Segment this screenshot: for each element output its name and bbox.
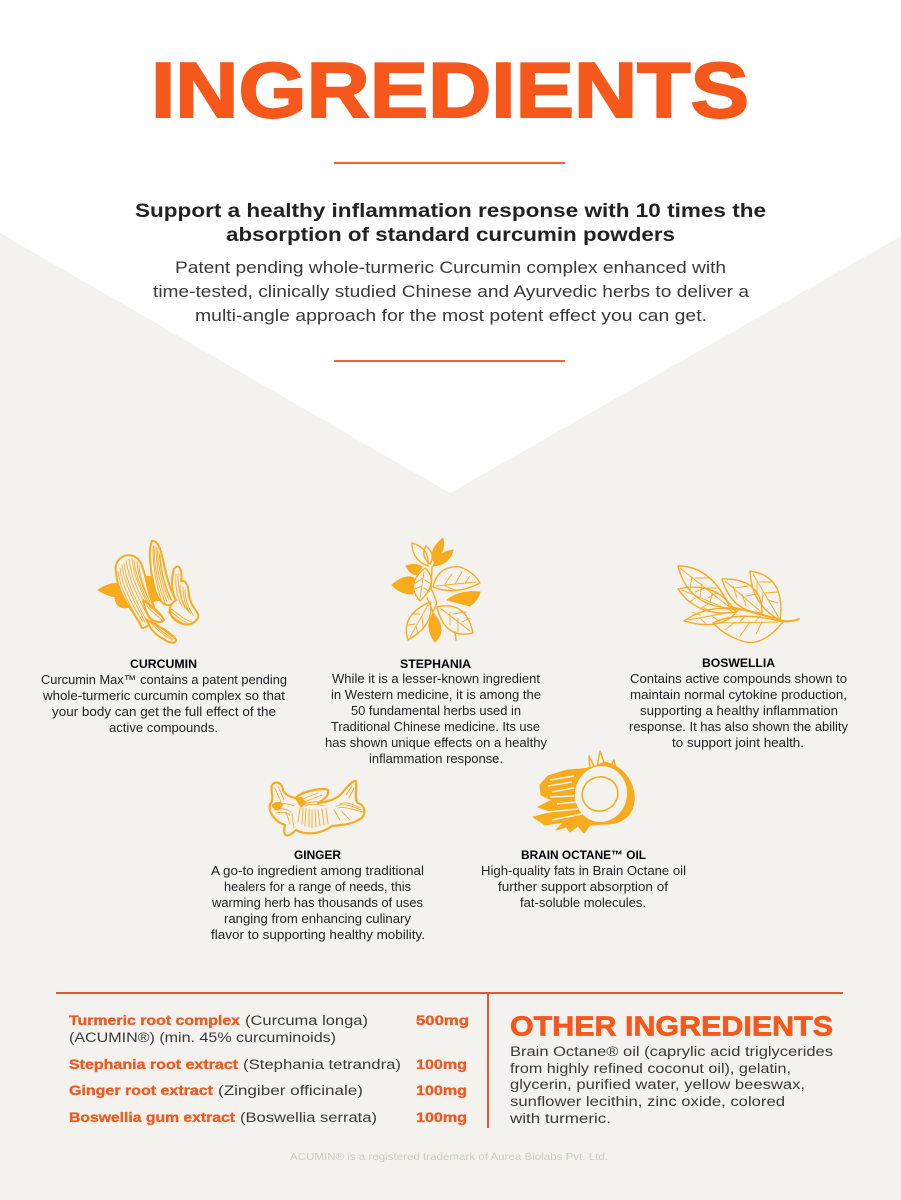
stephania description: While it is a lesser-known ingredient (332, 672, 541, 686)
row: ginger root extract: (Zingiber officinale) (218, 1083, 363, 1099)
card: ginger: GINGER (294, 848, 341, 862)
row: stephania root extract (69, 1057, 467, 1073)
row: turmeric root complex: (Curcuma longa) (245, 1013, 368, 1029)
brain octane description: High-quality fats in Brain Octane oil (481, 864, 686, 878)
row: stephania root extract: 100mg (416, 1057, 467, 1073)
intro body: multi-angle approach for the most potent effect you can get. (195, 306, 707, 325)
footnote: ACUMIN® is a registered trademark of Aurea Biolabs Pvt. Ltd. (290, 1151, 608, 1163)
row: turmeric root complex: 500mg (416, 1013, 469, 1029)
intro heading (135, 200, 766, 246)
boswellia description: to support joint health. (672, 736, 804, 750)
other ingredients (509, 1010, 833, 1127)
other ingredients text (509, 1044, 833, 1127)
supplement facts list (69, 1013, 469, 1126)
other ingredients text: glycerin, purified water, yellow beeswax, (510, 1077, 805, 1093)
boswellia description (629, 672, 849, 750)
icon: coconut (533, 751, 634, 833)
brain octane description: further support absorption of (498, 880, 669, 894)
ginger description: ranging from enhancing culinary (224, 912, 412, 926)
title: INGREDIENTS (151, 46, 749, 134)
card: ginger (211, 848, 425, 942)
row: boswellia gum extract: 100mg (416, 1110, 467, 1126)
boswellia description: maintain normal cytokine production, (630, 688, 847, 702)
ginger description: flavor to supporting healthy mobility. (211, 928, 425, 942)
stephania description: in Western medicine, it is among the (331, 688, 541, 702)
row: boswellia gum extract: (Boswellia serrata) (240, 1110, 377, 1126)
curcumin description (41, 673, 287, 735)
row: stephania root extract: (Stephania tetrandra) (243, 1057, 401, 1073)
boswellia description: Contains active compounds shown to (630, 672, 847, 686)
boswellia description: response. It has also shown the ability (629, 720, 849, 734)
row: ginger root extract (69, 1083, 467, 1099)
intro heading: Support a healthy inflammation response with 10 times the (135, 200, 766, 222)
row: stephania root extract: Stephania root extract (69, 1057, 238, 1073)
icon: curcumin root (98, 541, 198, 643)
row: turmeric root complex (69, 1013, 469, 1046)
curcumin description: active compounds. (109, 721, 218, 735)
ginger description: healers for a range of needs, this (224, 880, 411, 894)
icon: ginger root (270, 781, 364, 835)
boswellia description: supporting a healthy inflammation (640, 704, 838, 718)
curcumin description: your body can get the full effect of the (52, 705, 276, 719)
row: turmeric root complex: (ACUMIN®) (min. 45% curcuminoids) (69, 1030, 336, 1046)
other ingredients text: sunflower lecithin, zinc oxide, colored (510, 1094, 785, 1110)
intro body: Patent pending whole-turmeric Curcumin complex enhanced with (175, 258, 726, 277)
card: brain octane oil (481, 848, 686, 910)
row: boswellia gum extract: Boswellia gum extract (69, 1110, 235, 1126)
card: curcumin: CURCUMIN (130, 657, 197, 671)
card: brain octane oil: BRAIN OCTANE™ OIL (521, 848, 647, 862)
card: boswellia: BOSWELLIA (702, 656, 775, 670)
ginger description: A go-to ingredient among traditional (211, 864, 424, 878)
card: boswellia (629, 656, 849, 750)
icon: boswellia leaves (678, 566, 799, 642)
intro body (153, 258, 750, 325)
stephania description: 50 fundamental herbs used in (351, 704, 521, 718)
row: turmeric root complex: Turmeric root complex (69, 1013, 240, 1029)
ginger description: warming herb has thousands of uses (211, 896, 423, 910)
row: boswellia gum extract (69, 1110, 467, 1126)
card: stephania: STEPHANIA (400, 657, 471, 671)
other ingredients heading: OTHER INGREDIENTS (510, 1010, 833, 1042)
card: stephania (325, 657, 548, 766)
curcumin description: Curcumin Max™ contains a patent pending (41, 673, 287, 687)
stephania description: has shown unique effects on a healthy (325, 736, 548, 750)
icon: stephania leaves (392, 538, 480, 642)
brain octane description: fat-soluble molecules. (520, 896, 646, 910)
curcumin description: whole-turmeric curcumin complex so that (42, 689, 286, 703)
stephania description: Traditional Chinese medicine. Its use (331, 720, 540, 734)
stephania description (325, 672, 548, 766)
intro body: time-tested, clinically studied Chinese and Ayurvedic herbs to deliver a (153, 282, 750, 301)
intro text block (135, 200, 766, 325)
other ingredients text: Brain Octane® oil (caprylic acid triglycerides (510, 1044, 833, 1060)
other ingredients text: with turmeric. (509, 1111, 611, 1127)
stephania description: inflammation response. (369, 752, 503, 766)
ginger description (211, 864, 425, 942)
other ingredients text: from highly refined coconut oil), gelatin, (510, 1061, 791, 1077)
intro heading: absorption of standard curcumin powders (226, 224, 675, 246)
card: curcumin (41, 657, 287, 735)
row: ginger root extract: Ginger root extract (69, 1083, 213, 1099)
row: ginger root extract: 100mg (416, 1083, 467, 1099)
brain octane description (481, 864, 686, 910)
